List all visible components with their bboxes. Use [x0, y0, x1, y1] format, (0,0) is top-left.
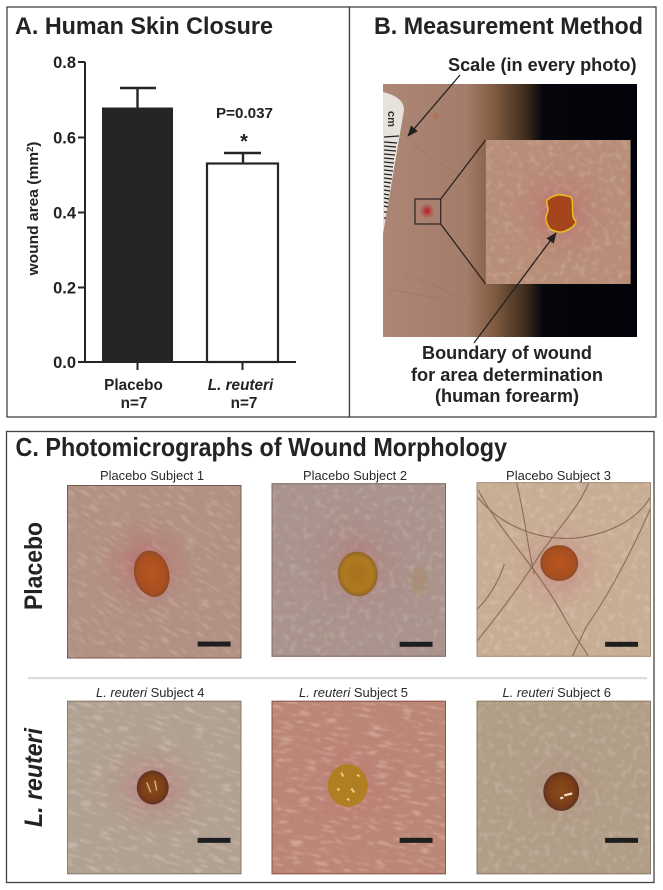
caption: L. reuteri subject 4: L. reuteri Subject 4 [96, 685, 204, 700]
p value: P=0.037 [216, 105, 273, 122]
y-axis tick labels: 0.6 [53, 130, 76, 148]
y-axis title: ) [25, 141, 42, 147]
y-axis tick labels: 0.8 [53, 54, 76, 72]
caption: L. reuteri subject 5: L. reuteri Subject 5 [299, 685, 408, 700]
zoom connector lines [441, 140, 486, 284]
L. reuteri bar with error bar [207, 153, 278, 362]
panel B heading: B. Measurement Method [374, 13, 643, 40]
boundary label: (human forearm) [435, 386, 579, 406]
axes [78, 62, 296, 370]
wound [129, 547, 174, 601]
scale bar [400, 642, 433, 647]
bar chart [25, 54, 296, 412]
wound [137, 771, 169, 804]
hairs [476, 482, 651, 657]
panel C heading: C. Photomicrographs of Wound Morphology [16, 432, 507, 462]
zoom box on wound [415, 199, 441, 224]
boundary label: for area determination [411, 365, 603, 385]
traced wound boundary [546, 195, 576, 232]
forearm photo [383, 84, 637, 337]
y-axis tick labels: 0.0 [53, 354, 76, 372]
boundary label: Boundary of wound [422, 343, 592, 363]
y-axis tick labels [53, 54, 77, 372]
panel C: photomicrographs [6, 432, 654, 882]
y-axis title: 2 [25, 147, 35, 152]
scale bar [605, 642, 638, 647]
y-axis tick labels: 0.2 [53, 280, 76, 298]
photo: L. reuteri subject 4 [67, 700, 242, 874]
panel A heading: A. Human Skin Closure [15, 13, 273, 40]
scale bar [198, 642, 231, 647]
scale bar [400, 838, 433, 843]
photo: L. reuteri subject 6 [476, 700, 651, 874]
photo: placebo subject 1 [67, 485, 242, 658]
wound [328, 764, 368, 807]
caption: placebo subject 2: Placebo Subject 2 [303, 468, 407, 483]
y-axis tick labels: 0.4 [53, 204, 77, 222]
row divider [28, 677, 647, 679]
photo: L. reuteri subject 5 [272, 700, 446, 874]
panel B: measurement method [350, 7, 656, 417]
caption: L. reuteri subject 6: L. reuteri Subject 6 [502, 685, 611, 700]
scale bar [198, 838, 231, 843]
row label: L. reuteri: L. reuteri [20, 727, 48, 827]
significance asterisk: * [240, 131, 248, 153]
caption: placebo subject 3: Placebo Subject 3 [506, 468, 611, 483]
photo: placebo subject 3 [476, 482, 651, 657]
scale label: Scale (in every photo) [448, 55, 636, 75]
x label: placebo: n=7 [121, 395, 147, 412]
panel A: human skin closure [7, 7, 350, 417]
placebo bar with error bar [102, 88, 173, 362]
x label: placebo: Placebo [104, 377, 163, 394]
arrow to scale [408, 75, 460, 136]
ruler: cm [385, 111, 397, 127]
x label: L. reuteri: n=7 [231, 395, 257, 412]
row label: placebo: Placebo [20, 522, 48, 610]
caption: placebo subject 1: Placebo Subject 1 [100, 468, 204, 483]
photo: placebo subject 2 [272, 483, 446, 657]
wound [540, 545, 578, 581]
arrow to wound boundary [474, 233, 556, 343]
scale bar [605, 838, 638, 843]
inset enlarged wound [486, 140, 631, 284]
wound [543, 772, 579, 811]
y-axis title: wound area (mm [25, 156, 42, 276]
x label: L. reuteri: L. reuteri [208, 377, 274, 394]
ruler [383, 92, 404, 234]
wound [335, 549, 381, 599]
